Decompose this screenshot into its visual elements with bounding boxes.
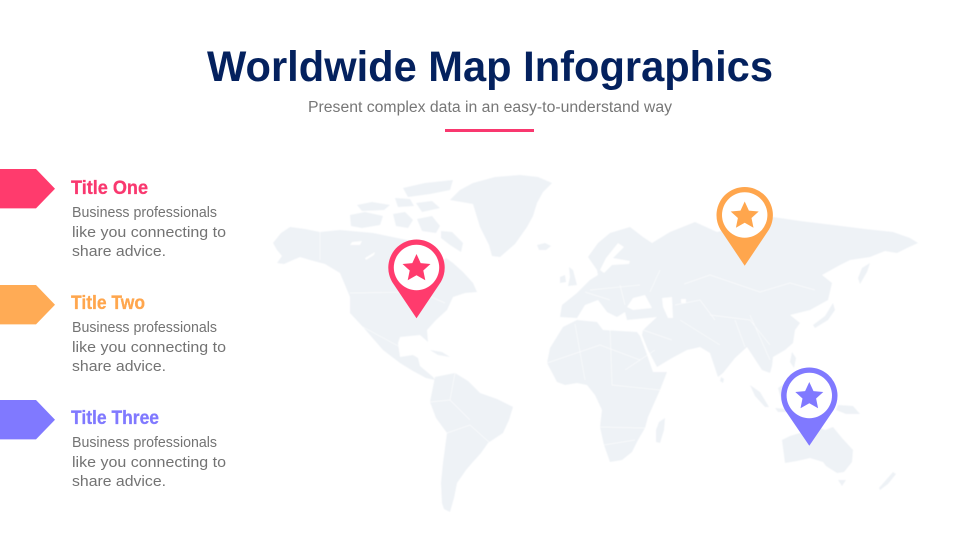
- text three: share advice.: [72, 473, 166, 490]
- text three: like you connecting to: [72, 454, 226, 471]
- australia: [782, 424, 853, 473]
- canadian arctic islands: [350, 180, 463, 252]
- pin: north america: [388, 239, 445, 318]
- africa: [547, 320, 667, 462]
- text one: like you connecting to: [72, 224, 226, 241]
- text one: share advice.: [72, 243, 166, 260]
- new zealand: [879, 472, 896, 490]
- pin: australia: [781, 367, 838, 446]
- item three: [0, 400, 226, 490]
- eurasia: [560, 217, 918, 377]
- item two: [0, 285, 226, 375]
- heading two: Title Two: [71, 293, 145, 314]
- tasmania: [838, 480, 846, 486]
- iceland: [537, 243, 551, 250]
- subtitle: Present complex data in an easy-to-understand way: [308, 99, 672, 116]
- title: Worldwide Map Infographics: [207, 43, 773, 91]
- heading three: Title Three: [71, 408, 159, 429]
- inland seas: [350, 241, 686, 318]
- sakhalin: [858, 263, 870, 284]
- world map: [273, 175, 918, 512]
- pin: russia: [716, 187, 773, 266]
- greenland: [450, 175, 552, 257]
- cuba: [430, 350, 450, 357]
- arrow one: [0, 169, 55, 208]
- item one: [0, 169, 226, 260]
- map borders: [320, 232, 815, 445]
- philippines and sri lanka: [720, 352, 796, 383]
- japan: [813, 303, 835, 328]
- text three: Business professionals: [72, 434, 217, 451]
- south america: [430, 373, 513, 512]
- uk and ireland: [560, 267, 577, 286]
- text two: Business professionals: [72, 319, 217, 336]
- north america: [273, 227, 477, 380]
- text two: like you connecting to: [72, 339, 226, 356]
- indonesia: [750, 380, 860, 414]
- madagascar: [656, 418, 665, 443]
- text two: share advice.: [72, 358, 166, 375]
- heading one: Title One: [71, 178, 148, 199]
- title underline: [445, 129, 534, 132]
- arrow two: [0, 285, 55, 324]
- text one: Business professionals: [72, 204, 217, 221]
- arrow three: [0, 400, 55, 439]
